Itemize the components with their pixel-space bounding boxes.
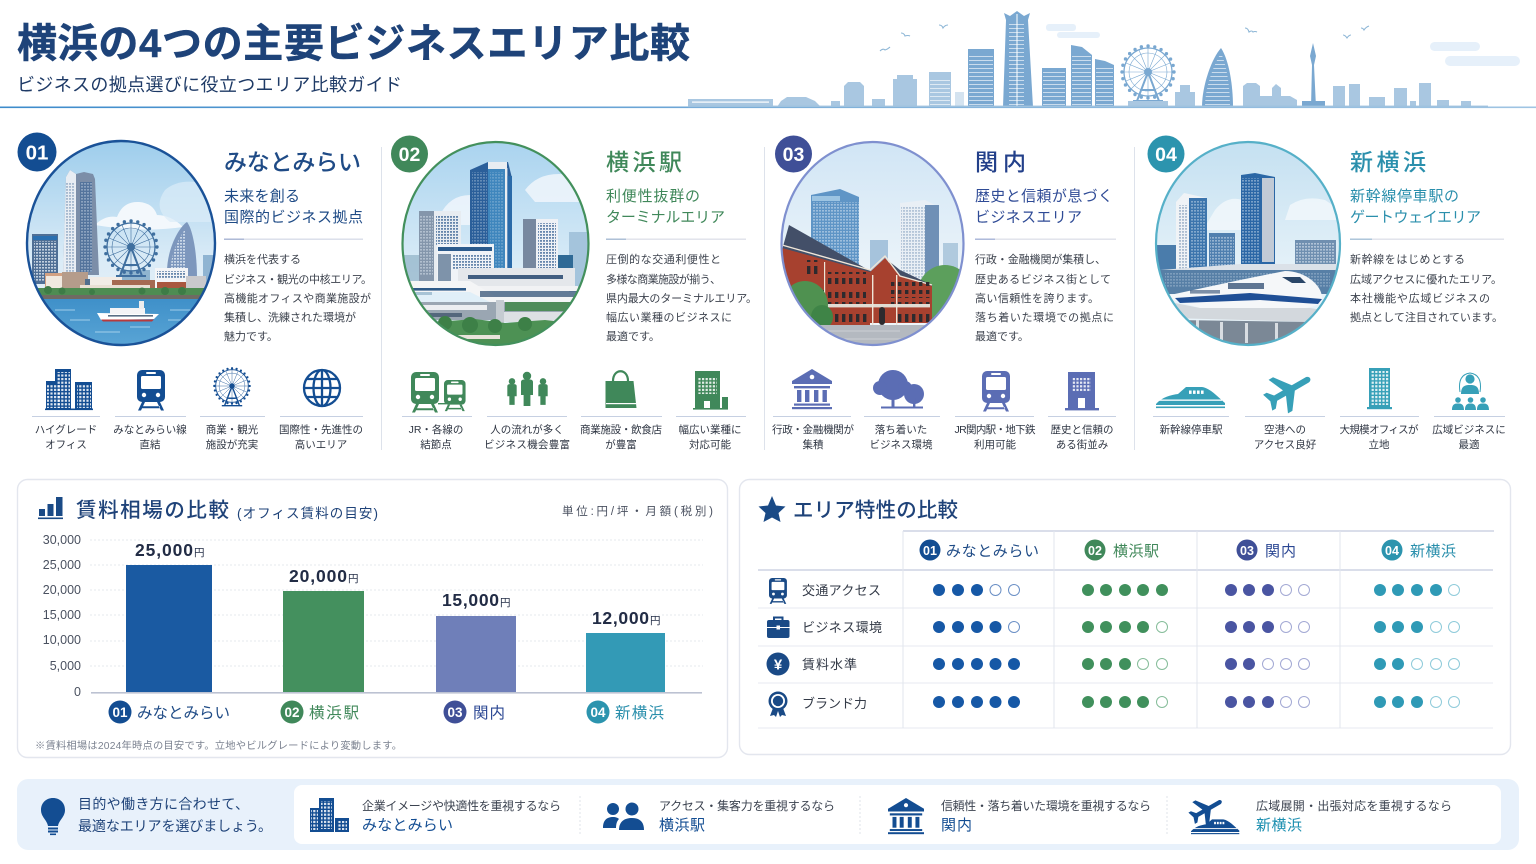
body text: 行政・金融機関が集積し、: [975, 252, 1106, 266]
icon labels: 商業施設・飲食店: [580, 423, 662, 436]
rating dots: shin-yokohama: [1374, 584, 1460, 708]
illustration: kannai: [780, 140, 973, 347]
bar: yokohama: 円: [348, 573, 358, 585]
icon labels: みなとみらい線: [113, 423, 187, 436]
table header: 02: [1088, 544, 1102, 558]
icon labels: ビジネス機会豊富: [484, 438, 570, 451]
tagline: ゲートウェイエリア: [1350, 209, 1481, 226]
row label: transport: 交通アクセス: [802, 583, 881, 598]
panel: area characteristics: [740, 480, 1510, 754]
item: shin-yokohama: [1185, 789, 1452, 834]
illustration: minatomirai: [25, 140, 220, 349]
name: 新横浜: [1350, 149, 1426, 175]
icon: network people: [1452, 373, 1489, 410]
icon: building: [693, 371, 728, 410]
bar: kannai: [436, 590, 516, 693]
icon labels: 直結: [140, 438, 161, 451]
item: kannai: 関内: [941, 817, 972, 834]
body text: 最適です。: [606, 329, 660, 343]
tagline: [1350, 188, 1481, 226]
badge 01: 01: [26, 142, 48, 164]
y axis labels: 0: [74, 685, 81, 699]
body text: 拠点として注目されています。: [1350, 311, 1503, 324]
item: yokohama: [603, 798, 835, 834]
icon labels: 集積: [802, 438, 824, 451]
body text: 集積し、洗練された環境が: [224, 310, 356, 324]
icon labels: オフィス: [45, 439, 87, 451]
icon labels: 新幹線停車駅: [1160, 423, 1223, 436]
icon labels: ハイグレード: [35, 423, 97, 436]
bar: kannai: 15,000: [442, 590, 499, 610]
table header: みなとみらい: [946, 543, 1039, 560]
panel: minatomirai: [18, 132, 372, 451]
icon: bank: [792, 369, 832, 409]
x labels: 横浜駅: [309, 704, 359, 722]
body text: 高い信頼性を誇ります。: [975, 291, 1099, 305]
body text: 高機能オフィスや商業施設が: [224, 291, 371, 305]
icon labels: アクセス良好: [1254, 438, 1317, 451]
x labels: 02: [284, 705, 300, 720]
item: kannai: 信頼性・落ち着いた環境を重視するなら: [941, 798, 1151, 813]
icon labels: 利用可能: [974, 438, 1016, 451]
tagline: 新幹線停車駅の: [1350, 188, 1459, 205]
icon labels: 空港への: [1264, 424, 1306, 436]
icon: building: [1065, 372, 1099, 410]
icon: train: [982, 371, 1010, 412]
body text: [606, 252, 757, 343]
row label: business: ビジネス環境: [802, 620, 882, 635]
heading: エリア特性の比較: [793, 499, 958, 522]
body text: ビジネス・観光の中核エリア。: [224, 272, 372, 286]
icon labels: [409, 423, 742, 451]
rating dots: minatomirai: [933, 584, 1020, 708]
subtitle: ビジネスの拠点選びに役立つエリア比較ガイド: [17, 75, 402, 95]
badge 03: 03: [783, 144, 804, 166]
tagline: 国際的ビジネス拠点: [224, 209, 363, 226]
bar: shin-yokohama: 12,000: [592, 608, 649, 628]
table header: 関内: [1265, 543, 1296, 560]
icon labels: 最適: [1458, 438, 1480, 451]
icon labels: 人の流れが多く: [490, 423, 564, 436]
bar: minatomirai: 25,000: [135, 540, 193, 560]
bar: yokohama: [283, 566, 364, 693]
icon labels: ビジネス環境: [870, 439, 933, 451]
item: minatomirai: [310, 798, 561, 834]
icon: trees: [873, 370, 924, 408]
tagline: [224, 188, 363, 226]
table header: 新横浜: [1410, 543, 1456, 560]
illustration: yokohama station: [400, 140, 595, 350]
icon: shinkansen: [1156, 387, 1225, 408]
icon labels: 行政・金融機関が: [772, 423, 854, 436]
x labels: 01: [112, 705, 128, 720]
icon labels: JR・各線の: [409, 423, 463, 436]
table header: 04: [1385, 544, 1399, 558]
y axis labels: [43, 533, 81, 699]
icon labels: 施設が充実: [206, 438, 259, 451]
table header: 03: [1240, 544, 1254, 558]
x labels: 04: [590, 705, 606, 720]
footnote: ※賃料相場は2024年時点の目安です。立地やビルグレードにより変動します。: [35, 739, 402, 752]
bar: yokohama: 20,000: [289, 566, 347, 586]
tagline: 利便性抜群の: [606, 188, 700, 205]
row icon: yen: [766, 652, 790, 676]
icon: train: [137, 370, 165, 410]
tagline: [975, 187, 1113, 226]
icon labels: JR関内駅・地下鉄: [954, 423, 1036, 436]
icon labels: 商業・観光: [206, 423, 259, 436]
icon: globe: [304, 370, 340, 406]
y axis labels: 5,000: [50, 659, 81, 673]
icon labels: 対応可能: [689, 438, 731, 451]
item: shin-yokohama: 新横浜: [1256, 817, 1302, 834]
icon labels: 落ち着いた: [875, 423, 927, 436]
item: yokohama: 横浜駅: [659, 817, 705, 834]
row label: brand: ブランド力: [802, 696, 867, 711]
icon labels: [1160, 423, 1506, 451]
row icon: rosette: [768, 692, 788, 717]
chart heading: [76, 499, 378, 522]
name: みなとみらい: [224, 149, 361, 175]
bar: shin-yokohama: [586, 608, 665, 693]
illustration: shin-yokohama: [1154, 140, 1342, 348]
icon labels: が豊富: [605, 438, 637, 451]
icon: star: [758, 496, 786, 522]
panel: rent chart: [18, 480, 728, 758]
call to action: 最適なエリアを選びましょう。: [78, 818, 272, 834]
item: kannai: [888, 798, 1151, 834]
body text: 魅力です。: [224, 329, 278, 343]
body text: 県内最大のターミナルエリア。: [606, 291, 757, 305]
header rule: [0, 106, 1536, 108]
panel: recommendation bar: [17, 779, 1519, 850]
dividers: [381, 147, 1135, 450]
y axis labels: 30,000: [43, 533, 81, 547]
icon: bar chart: [38, 497, 63, 519]
icon: ferris wheel: [214, 368, 250, 406]
item: minatomirai: 企業イメージや快適性を重視するなら: [362, 799, 561, 813]
badge 02: 02: [399, 144, 420, 166]
badge 04: 04: [1155, 144, 1177, 166]
panel: yokohama station: [391, 136, 757, 451]
body text: 圧倒的な交通利便性と: [606, 252, 721, 266]
item: shin-yokohama: 広域展開・出張対応を重視するなら: [1256, 799, 1452, 813]
y axis labels: 20,000: [43, 583, 81, 597]
icon labels: [772, 423, 1114, 451]
icon labels: 広域ビジネスに: [1432, 423, 1506, 436]
table grid: [758, 531, 1494, 728]
table header: [920, 540, 1456, 560]
row label: rent: 賃料水準: [802, 657, 857, 672]
table header: 横浜駅: [1113, 543, 1159, 560]
item: minatomirai: みなとみらい: [362, 817, 453, 834]
y axis labels: 15,000: [43, 608, 81, 622]
name: 横浜駅: [606, 149, 682, 175]
rating dots: yokohama: [1082, 584, 1168, 708]
tagline: ターミナルエリア: [606, 209, 725, 226]
body text: [224, 252, 372, 343]
body text: 幅広い業種のビジネスに: [606, 310, 732, 324]
icon labels: 幅広い業種に: [678, 423, 742, 436]
tagline: [606, 188, 725, 226]
icon labels: 高いエリア: [295, 438, 347, 451]
icon: light bulb: [41, 798, 65, 835]
body text: 広域アクセスに優れたエリア。: [1350, 273, 1502, 286]
icon: office: [45, 369, 93, 410]
bar: minatomirai: 円: [194, 547, 204, 559]
icon: shopping bag: [606, 371, 636, 408]
x labels: みなとみらい: [137, 704, 230, 722]
chart heading: (オフィス賃料の目安): [237, 506, 378, 521]
item: yokohama: アクセス・集客力を重視するなら: [659, 798, 835, 813]
x labels: 新横浜: [615, 704, 664, 722]
body text: 歴史あるビジネス街として: [975, 272, 1111, 286]
bar: kannai: 円: [500, 597, 510, 609]
body text: 落ち着いた環境での拠点に: [975, 310, 1114, 324]
badge 04: [1148, 136, 1184, 172]
icon labels: ある街並み: [1056, 438, 1108, 451]
badge 02: [391, 136, 428, 172]
icon labels: [35, 423, 363, 451]
icon labels: 結節点: [420, 438, 452, 451]
x labels: 03: [447, 705, 463, 720]
icon: trains: [411, 372, 466, 412]
badge 01: [18, 132, 56, 172]
tagline: 未来を創る: [224, 188, 300, 205]
panel: shin-yokohama: [1148, 136, 1506, 451]
icon: airplane: [1258, 361, 1320, 420]
body text: [975, 252, 1114, 343]
unit note: 単位:円/坪・月額(税別): [562, 504, 713, 518]
bar: shin-yokohama: 円: [650, 615, 660, 627]
skyline illustration: [688, 11, 1520, 107]
icon labels: 国際性・先進性の: [279, 423, 363, 436]
call to action: [78, 796, 272, 834]
body text: 多様な商業施設が揃う、: [606, 272, 721, 286]
bar: minatomirai: [126, 540, 212, 693]
tagline: ビジネスエリア: [975, 209, 1082, 226]
row icon: transport: [769, 578, 787, 604]
title: 横浜の4つの主要ビジネスエリア比較: [17, 22, 690, 66]
x labels: 関内: [473, 704, 505, 722]
icon: tower building: [1367, 368, 1392, 409]
rating dots: kannai: [1225, 584, 1310, 708]
row icon: yen: ¥: [774, 656, 783, 674]
y axis labels: 10,000: [43, 633, 81, 647]
panel: kannai: [772, 136, 1116, 451]
icon labels: 歴史と信頼の: [1050, 423, 1114, 436]
body text: 最適です。: [975, 329, 1029, 343]
table header: 01: [923, 544, 937, 558]
y axis labels: 25,000: [43, 558, 81, 572]
body text: [1350, 253, 1503, 324]
body text: 本社機能や広域ビジネスの: [1350, 291, 1490, 305]
chart heading: 賃料相場の比較: [76, 499, 230, 522]
icon: people: [507, 372, 548, 406]
tagline: 歴史と信頼が息づく: [975, 187, 1113, 205]
row icon: briefcase: [767, 616, 790, 638]
body text: 横浜を代表する: [224, 252, 301, 266]
badge 03: [775, 136, 812, 172]
call to action: 目的や働き方に合わせて、: [78, 796, 249, 812]
name: 関内: [975, 149, 1026, 175]
icon labels: 大規模オフィスが: [1340, 423, 1419, 436]
icon labels: 立地: [1368, 438, 1390, 451]
x labels: [108, 700, 664, 724]
body text: 新幹線をはじめとする: [1350, 253, 1465, 266]
